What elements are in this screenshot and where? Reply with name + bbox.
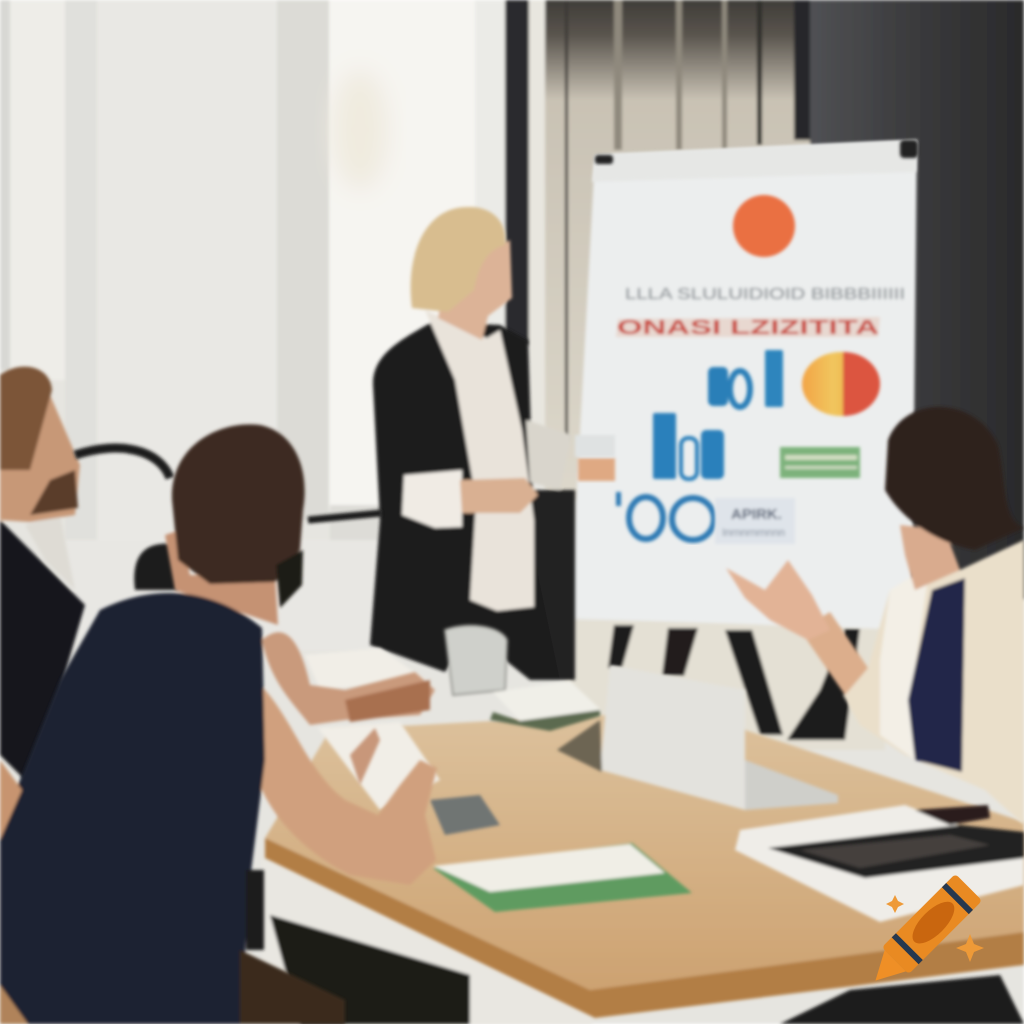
person: woman at right (726, 407, 1024, 825)
pale panel patch (575, 435, 615, 457)
woman hand (726, 560, 830, 640)
dark pillar (505, 0, 529, 345)
left arm sliver (0, 760, 22, 840)
floor and chair under table (262, 860, 1024, 1024)
man beard (276, 550, 303, 608)
presenter jacket (370, 322, 560, 680)
white paper right (735, 805, 1024, 922)
flip chart easel legs (565, 620, 885, 750)
dark wall (810, 0, 1024, 600)
front arm (255, 680, 437, 885)
man collar (25, 515, 75, 590)
chair back (75, 448, 382, 590)
tablet (768, 825, 1024, 878)
presenter neck and face (438, 240, 512, 340)
presenter shirt (425, 310, 534, 611)
man t-shirt (0, 593, 265, 1024)
presenter hand (460, 478, 538, 513)
man face (0, 395, 80, 522)
paper under hand (318, 722, 440, 810)
man hair (0, 367, 52, 470)
woman inner collar (880, 565, 930, 760)
dark backdrop at presenter's right (530, 490, 575, 680)
bar chart: top blue (708, 350, 783, 407)
person: presenter (370, 207, 575, 680)
items on table (305, 626, 1024, 922)
panel: table (265, 715, 1024, 1018)
man neck (165, 530, 278, 625)
glass (445, 626, 507, 695)
red subheading stripe: ONASI LZIZITITA (617, 317, 879, 339)
paper left (305, 648, 425, 690)
small caption text (715, 498, 795, 544)
bar chart: lower blue (653, 413, 724, 479)
tan note (578, 458, 615, 481)
chair foreground (240, 950, 345, 1024)
curtain (545, 0, 810, 500)
man jacket (0, 520, 85, 780)
woman top (908, 578, 965, 772)
presenter sleeve (402, 470, 462, 528)
notebook stack (493, 681, 601, 721)
blurred heading text line: LLLA SLULUIDIOID BIBBBIIIIII (625, 286, 905, 303)
pie chart: orange and red (802, 352, 880, 416)
person: man far left (0, 367, 85, 780)
presenter hair (411, 207, 505, 312)
logo: crayon with sparkles (862, 874, 984, 994)
woman cardigan (843, 540, 1024, 825)
woman face (900, 525, 960, 590)
back arm (upper) (262, 632, 435, 725)
crayon body (862, 874, 982, 994)
chart clips (595, 140, 918, 164)
man head hair (172, 424, 305, 584)
green table (780, 447, 860, 478)
woman forearm (800, 612, 868, 695)
phone on table (430, 795, 500, 835)
laptop (600, 665, 745, 810)
panel: flip chart board (570, 140, 918, 630)
blue rings (616, 492, 714, 540)
red subheading stripe (616, 317, 880, 339)
woman hair (885, 407, 1024, 550)
icon: orange circle (733, 195, 795, 257)
person: man in dark t-shirt (0, 424, 437, 1024)
sparkle left (886, 895, 904, 913)
small caption text: APIRK. (731, 506, 782, 523)
green notebook (433, 843, 692, 912)
sparkle right (956, 934, 984, 962)
small caption text: Inrnnrnrnnnn (722, 527, 785, 539)
